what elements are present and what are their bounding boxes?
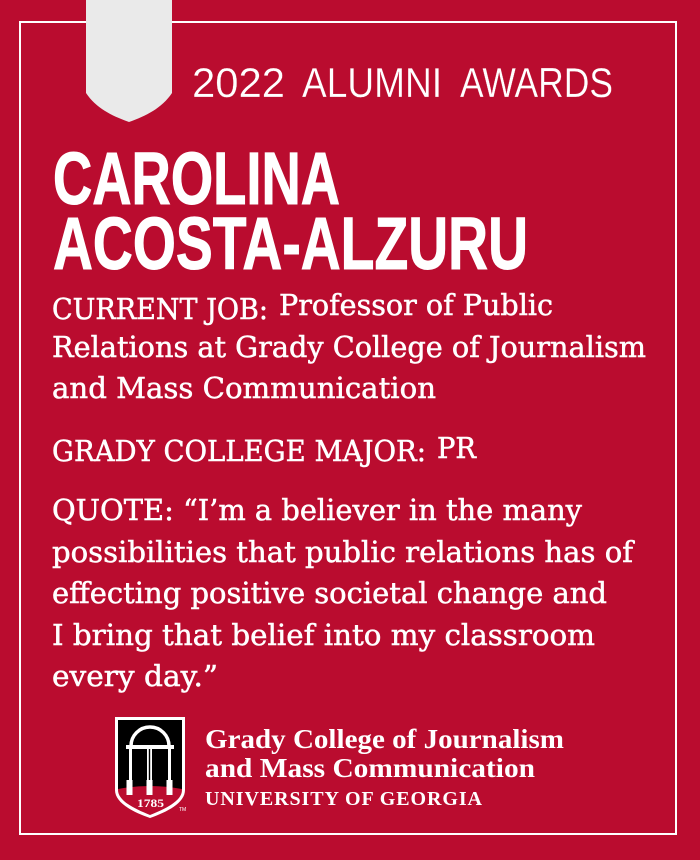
quote text: I bring that belief into my classroom <box>52 619 595 652</box>
icon: university shield logo: 1785 <box>137 796 164 810</box>
quote text: possibilities that public relations has of <box>52 536 636 569</box>
current job text <box>52 289 646 405</box>
header: 2022 alumni awards: ALUMNI <box>302 59 442 106</box>
icon: university shield logo: TM <box>179 807 186 813</box>
bookmark tab <box>86 0 172 122</box>
header: 2022 alumni awards <box>192 59 613 106</box>
college wordmark <box>205 724 565 810</box>
current job text: Relations at Grady College of Journalism <box>52 331 646 364</box>
icon: university shield logo <box>115 717 186 818</box>
name heading <box>53 137 528 285</box>
college wordmark: UNIVERSITY OF GEORGIA <box>205 788 483 810</box>
college wordmark: and Mass Communication <box>205 753 535 783</box>
current job text: and Mass Communication <box>52 372 436 405</box>
major text: PR <box>437 432 477 465</box>
quote text <box>52 494 636 693</box>
college wordmark: Grady College of Journalism <box>205 724 565 754</box>
current job text: Professor of Public <box>279 289 553 322</box>
name heading: ACOSTA-ALZURU <box>53 202 528 285</box>
name heading: CAROLINA <box>53 137 340 220</box>
quote text: effecting positive societal change and <box>52 577 607 610</box>
quote text: QUOTE: “I’m a believer in the many <box>52 494 583 527</box>
major text: GRADY COLLEGE MAJOR: <box>52 435 426 468</box>
header: 2022 alumni awards: AWARDS <box>460 59 613 106</box>
header: 2022 alumni awards: 2022 <box>192 59 285 106</box>
quote text: every day.” <box>52 660 218 693</box>
current job text: CURRENT JOB: <box>52 293 268 326</box>
